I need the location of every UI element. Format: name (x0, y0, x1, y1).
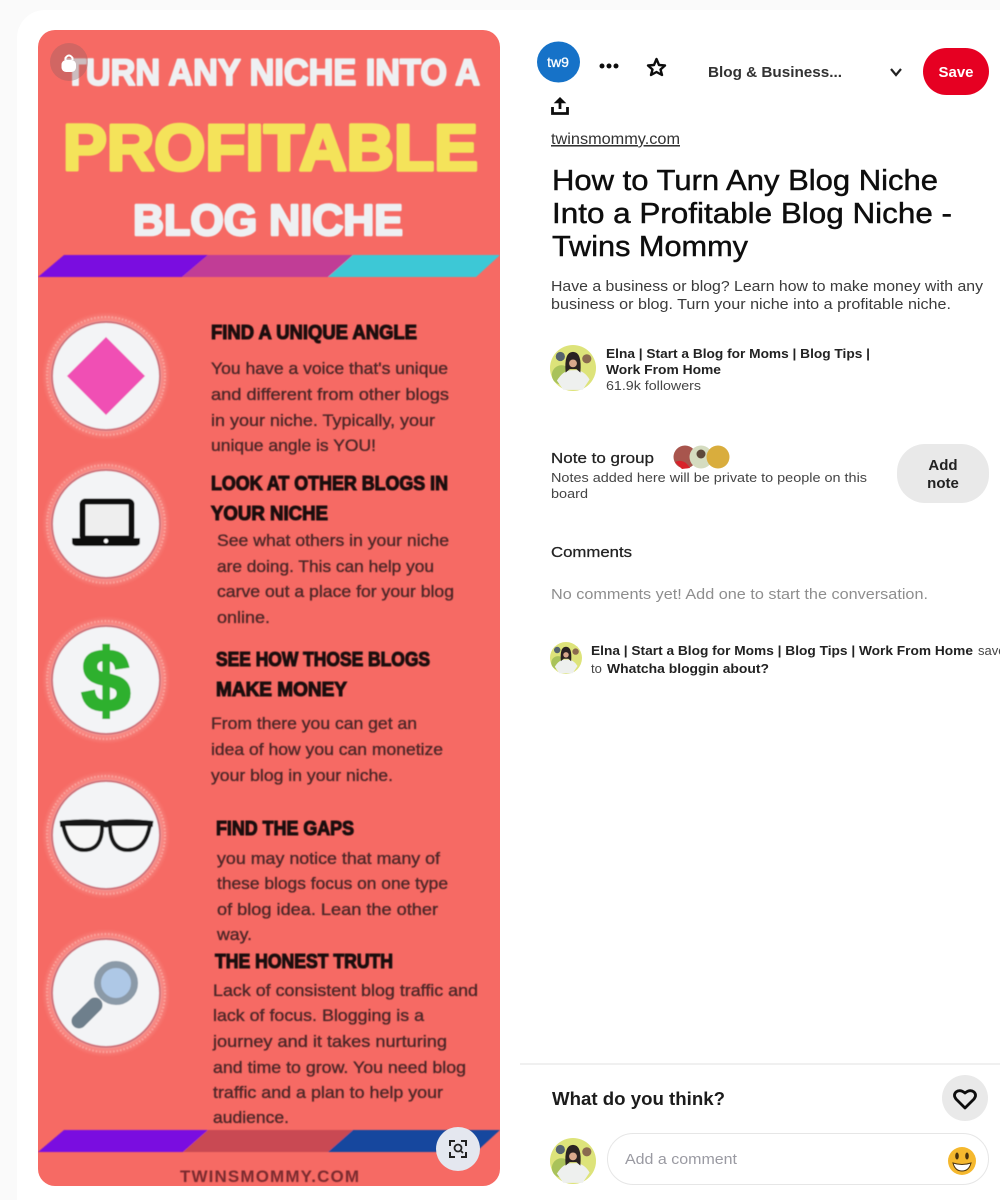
source link: twinsmommy.com (551, 131, 680, 148)
icon: laptop (42, 460, 170, 588)
infographic background (38, 30, 500, 1186)
comments heading: Comments (551, 544, 632, 561)
section: the honest truth: Lack of consistent blog traffic and (213, 981, 478, 1000)
author avatar (550, 345, 596, 391)
note to group: Note to group (551, 450, 654, 467)
title: PROFITABLE (63, 111, 478, 184)
section: the honest truth: THE HONEST TRUTH (215, 951, 393, 973)
note to group: Notes added here will be private to people on this (551, 470, 868, 485)
icon: heart button (942, 1075, 988, 1121)
add note button (897, 444, 989, 503)
section: see how those blogs make money (211, 649, 443, 785)
board name: Blog & Business... (708, 64, 842, 81)
icon: share (552, 98, 568, 114)
section: find a unique angle: You have a voice that's unique (211, 359, 448, 378)
save button (923, 48, 989, 95)
section: find the gaps: of blog idea. Lean the other (217, 900, 438, 919)
pin description: Have a business or blog? Learn how to make money with any (551, 279, 984, 295)
section: the honest truth: journey and it takes nurturing (212, 1032, 447, 1051)
section: look at other blogs: See what others in your niche (217, 531, 449, 550)
icon: blue profile avatar: tw9 (547, 54, 569, 70)
section: see how those blogs make money: MAKE MONEY (216, 679, 348, 701)
icon: dollar sign: $ (82, 631, 130, 730)
icon: visual search button (436, 1127, 480, 1171)
section: the honest truth: audience. (213, 1108, 289, 1127)
bottom colour stripes (38, 1130, 500, 1152)
small author avatar (550, 642, 582, 674)
section: look at other blogs: LOOK AT OTHER BLOGS IN (211, 473, 448, 495)
activity text: Elna | Start a Blog for Moms | Blog Tips | Work From Home (591, 643, 973, 658)
icon: more dots (600, 64, 618, 68)
note to group (551, 450, 868, 501)
pin description: business or blog. Turn your niche into a profitable niche. (551, 297, 951, 313)
panel: infographic pin image (38, 30, 500, 1186)
footer url: TWINSMOMMY.COM (180, 1167, 359, 1186)
author details: Elna | Start a Blog for Moms | Blog Tips | (606, 346, 870, 361)
icon: blue profile avatar (537, 42, 580, 82)
section: the honest truth (212, 951, 478, 1127)
icon: glasses (42, 771, 170, 899)
section: look at other blogs (211, 473, 454, 627)
activity text (591, 643, 1000, 676)
section: see how those blogs make money: your blog in your niche. (211, 766, 393, 785)
title: TURN ANY NICHE INTO A (65, 52, 480, 93)
add note button: note (927, 475, 959, 492)
icon: chevron (891, 69, 901, 75)
pin title: Into a Profitable Blog Niche - (552, 198, 952, 230)
group avatars (674, 446, 730, 469)
section: the honest truth: lack of focus. Blogging is a (213, 1006, 425, 1025)
section: find the gaps: FIND THE GAPS (216, 818, 354, 840)
section: look at other blogs: online. (217, 608, 270, 627)
pin description (551, 279, 984, 313)
icon: magnifying glass (42, 929, 170, 1057)
note to group: board (551, 486, 588, 501)
section: see how those blogs make money: From there you can get an (211, 714, 417, 733)
icon: lock badge (50, 43, 88, 81)
section: find the gaps: these blogs focus on one type (217, 874, 448, 893)
section: look at other blogs: YOUR NICHE (211, 503, 328, 525)
pin title (552, 165, 952, 263)
section: find a unique angle (211, 322, 449, 455)
comment input (608, 1134, 988, 1184)
comment input: Add a comment (625, 1151, 738, 1168)
empty comments text: No comments yet! Add one to start the conversation. (551, 587, 928, 603)
icon: smiley emoji (948, 1147, 976, 1175)
section: see how those blogs make money: SEE HOW THOSE BLOGS (216, 649, 430, 671)
icon: dollar sign (42, 616, 170, 744)
section: find a unique angle: and different from other blogs (211, 385, 449, 404)
author details (606, 346, 870, 393)
pin title: Twins Mommy (552, 231, 749, 263)
section: find a unique angle: FIND A UNIQUE ANGLE (211, 322, 417, 344)
section: look at other blogs: carve out a place for your blog (217, 582, 454, 601)
title: BLOG NICHE (133, 196, 403, 245)
section: find a unique angle: in your niche. Typically, your (211, 411, 435, 430)
section: the honest truth: traffic and a plan to help your (213, 1083, 443, 1102)
top colour stripes (38, 255, 500, 277)
add note button: Add (928, 457, 958, 474)
pin title: How to Turn Any Blog Niche (552, 165, 938, 197)
activity text: Whatcha bloggin about? (607, 661, 769, 676)
section: find the gaps (216, 818, 448, 944)
save button: Save (938, 64, 974, 81)
section: find a unique angle: unique angle is YOU! (211, 436, 376, 455)
section: find the gaps: you may notice that many of (217, 849, 440, 868)
activity text: to (591, 661, 602, 676)
author details: 61.9k followers (606, 378, 702, 393)
author details: Work From Home (606, 362, 721, 377)
footer divider (520, 1063, 1000, 1065)
section: see how those blogs make money: idea of how you can monetize (211, 740, 443, 759)
commenter avatar (550, 1138, 596, 1184)
section: look at other blogs: are doing. This can help you (217, 557, 434, 576)
panel: pin details (520, 42, 1000, 1184)
what do you think heading: What do you think? (552, 1088, 725, 1109)
title (63, 52, 480, 245)
infographic content (38, 52, 500, 1186)
section: the honest truth: and time to grow. You need blog (213, 1058, 466, 1077)
icon: diamond (42, 312, 170, 440)
section: find the gaps: way. (216, 925, 252, 944)
icon: star (648, 59, 665, 75)
